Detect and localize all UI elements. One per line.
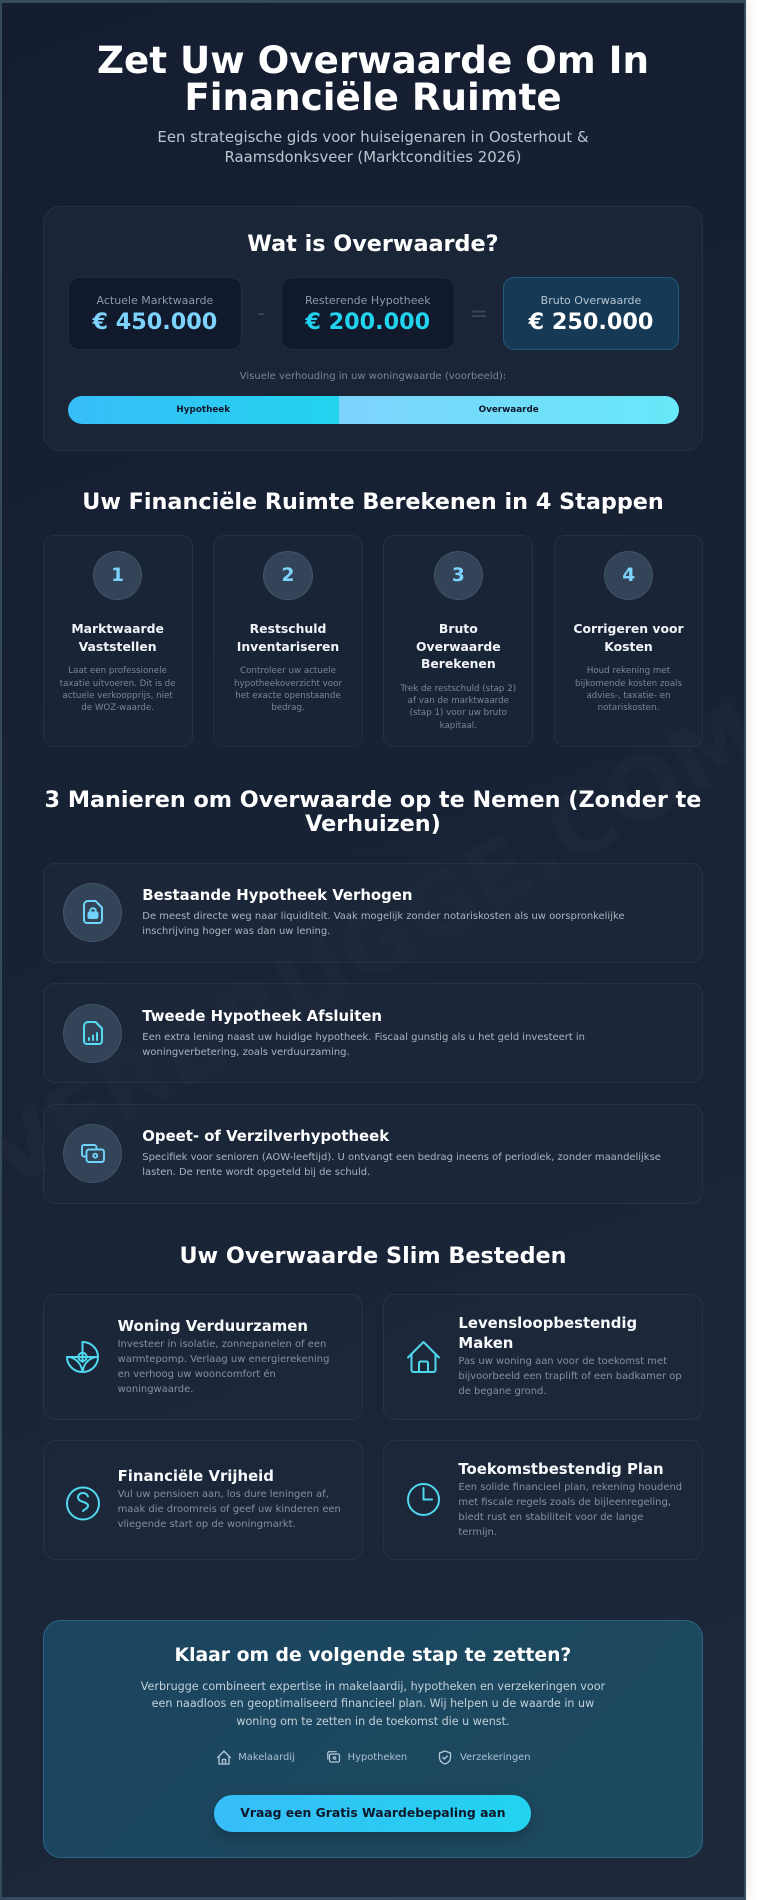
method title: Opeet- of Verzilverhypotheek — [142, 1127, 389, 1145]
label: Resterende Hypotheek — [305, 294, 431, 307]
panel heading: Wat is Overwaarde? — [247, 231, 499, 257]
heading: stappen: Uw Financiële Ruimte Berekenen in 4 Stappen — [82, 489, 664, 515]
card text: de begane grond. — [458, 1386, 547, 1397]
step title: Corrigeren voor — [573, 621, 684, 636]
step card 1 — [43, 535, 193, 747]
step number: 3 — [452, 565, 465, 586]
method card 1 — [43, 863, 703, 963]
step number: 1 — [111, 565, 124, 586]
step title — [237, 621, 339, 654]
step text: af van de marktwaarde — [408, 696, 509, 706]
method text — [142, 1032, 585, 1058]
card text: warmtepomp. Verlaag uw energierekening — [118, 1354, 329, 1364]
step title: Kosten — [604, 639, 653, 654]
card text — [118, 1489, 341, 1530]
cta title: Klaar om de volgende stap te zetten? — [175, 1645, 571, 1666]
method card 2 — [43, 983, 703, 1083]
use card: toekomstbestendig — [383, 1440, 703, 1560]
method text: Een extra lening naast uw huidige hypotheek. Fiscaal gunstig als u het geld investeert in — [142, 1032, 585, 1043]
service label: Verzekeringen — [460, 1752, 530, 1763]
icon: document with lock — [63, 883, 122, 942]
step title: Berekenen — [421, 656, 496, 671]
step text — [60, 666, 176, 713]
label: Actuele Marktwaarde — [96, 294, 213, 307]
step title: Vaststellen — [79, 639, 157, 654]
icon: banknotes — [327, 1751, 340, 1763]
step text: bedrag. — [271, 703, 305, 713]
step title: Marktwaarde — [71, 621, 164, 636]
method text — [142, 911, 624, 937]
step text — [575, 666, 682, 713]
method text — [142, 1152, 661, 1178]
step text: Houd rekening met — [587, 666, 670, 676]
subtitle — [157, 128, 589, 166]
card text: maak die droomreis of geef uw kinderen een — [118, 1504, 341, 1515]
icon: banknotes — [63, 1124, 122, 1183]
step title: Bruto — [439, 621, 478, 636]
header — [97, 38, 649, 166]
service: hypotheken — [327, 1751, 407, 1763]
card text: Een solide financieel plan, rekening houdend — [458, 1482, 682, 1493]
bar segment: hypotheek: Hypotheek — [176, 405, 230, 415]
step title — [416, 621, 501, 671]
panel: wat is overwaarde — [43, 206, 703, 451]
value box: marktwaarde — [68, 277, 242, 350]
cta text — [140, 1680, 606, 1728]
minus sign: - — [257, 300, 265, 326]
method text: inschrijving hoger was dan uw lening. — [142, 926, 330, 937]
heading: manieren: Verhuizen) — [305, 811, 441, 837]
step text: advies-, taxatie- en — [586, 691, 670, 701]
service label: Makelaardij — [238, 1752, 295, 1763]
card text: vliegende start op de woningmarkt. — [118, 1519, 296, 1530]
step number — [604, 551, 653, 600]
service: makelaardij — [217, 1750, 295, 1765]
method text: Specifiek voor senioren (AOW-leeftijd). U ontvangt een bedrag ineens of periodiek, zonder maandelijkse — [142, 1152, 661, 1163]
step card 4 — [554, 535, 703, 747]
step number — [434, 551, 483, 600]
use card: vrijheid — [43, 1440, 363, 1560]
card text: Vul uw pensioen aan, los dure leningen af, — [118, 1489, 329, 1500]
label: Bruto Overwaarde — [541, 294, 641, 307]
title — [97, 38, 649, 119]
step number: 2 — [282, 565, 294, 586]
heading: besteden: Uw Overwaarde Slim Besteden — [179, 1243, 567, 1269]
step title — [573, 621, 684, 654]
step title: Overwaarde — [416, 639, 501, 654]
heading: manieren: 3 Manieren om Overwaarde op te Nemen (Zonder te — [45, 787, 701, 813]
icon: house — [217, 1750, 231, 1765]
title: Financiële Ruimte — [184, 75, 562, 119]
card text: woningwaarde. — [118, 1384, 193, 1394]
card title: Toekomstbestendig Plan — [458, 1460, 664, 1478]
bar segment: overwaarde — [339, 396, 679, 424]
bar caption: Visuele verhouding in uw woningwaarde (voorbeeld): — [240, 371, 506, 382]
step text: (stap 1) voor uw bruto — [410, 708, 507, 718]
panel: call to action — [43, 1620, 703, 1858]
method title: Bestaande Hypotheek Verhogen — [142, 886, 412, 904]
value: € 200.000 — [305, 309, 430, 335]
method text: lasten. De rente wordt opgeteld bij de schuld. — [142, 1167, 370, 1178]
value box: bruto overwaarde — [503, 277, 679, 350]
service label: Hypotheken — [348, 1752, 407, 1763]
step text: hypotheekoverzicht voor — [234, 679, 342, 689]
value: € 250.000 — [529, 309, 653, 335]
step text: Controleer uw actuele — [240, 666, 336, 676]
method text: De meest directe weg naar liquiditeit. Vaak mogelijk zonder notariskosten als uw oorspronkelijke — [142, 911, 624, 922]
cta text: Verbrugge combineert expertise in makelaardij, hypotheken en verzekeringen voor — [141, 1680, 605, 1693]
icon: dollar coin — [66, 1486, 100, 1520]
step text — [400, 684, 516, 731]
use card: verduurzamen — [43, 1294, 363, 1420]
step number — [263, 551, 313, 600]
card text — [458, 1482, 682, 1538]
subtitle: Raamsdonksveer (Marktcondities 2026) — [225, 148, 521, 166]
method card 3 — [43, 1104, 703, 1204]
cta button — [214, 1795, 531, 1832]
subtitle: Een strategische gids voor huiseigenaren in Oosterhout & — [157, 128, 589, 146]
card text: termijn. — [458, 1527, 497, 1538]
step text: het exacte openstaande — [235, 691, 341, 701]
cta text: een naadloos en geoptimaliseerd financieel plan. Wij helpen u de waarde in uw — [152, 1697, 594, 1710]
card title: Levensloopbestendig — [458, 1314, 637, 1332]
step card 3 — [383, 535, 533, 747]
step number — [93, 551, 142, 600]
step text: kapitaal. — [440, 721, 477, 731]
heading: manieren — [45, 787, 701, 837]
use card: levensloopbestendig — [383, 1294, 703, 1420]
icon: house — [407, 1341, 440, 1373]
step text: Trek de restschuld (stap 2) — [400, 684, 516, 694]
step text — [234, 666, 342, 713]
cta button: Vraag een Gratis Waardebepaling aan — [240, 1806, 506, 1820]
step text: de WOZ-waarde. — [81, 703, 154, 713]
step number: 4 — [622, 565, 635, 586]
icon: document with bars — [63, 1004, 122, 1063]
value: € 450.000 — [92, 309, 217, 335]
step title: Restschuld — [250, 621, 326, 636]
card text — [118, 1338, 329, 1394]
proportion bar — [68, 396, 679, 424]
title: Zet Uw Overwaarde Om In — [97, 38, 649, 82]
step text: Laat een professionele — [68, 666, 167, 676]
card text: en verhoog uw wooncomfort én — [118, 1368, 276, 1380]
card text: Pas uw woning aan voor de toekomst met — [458, 1356, 667, 1367]
method title: Tweede Hypotheek Afsluiten — [142, 1007, 382, 1025]
card title: Woning Verduurzamen — [118, 1317, 308, 1335]
step text: taxatie uitvoeren. Dit is de — [60, 679, 176, 689]
step text: notariskosten. — [598, 703, 659, 713]
cta text: woning om te zetten in de toekomst die u wenst. — [236, 1715, 510, 1728]
card title — [458, 1314, 637, 1352]
card text: biedt rust en stabiliteit voor de lange — [458, 1512, 643, 1523]
card title: Financiële Vrijheid — [118, 1467, 274, 1485]
icon: eco globe — [66, 1341, 99, 1373]
service: verzekeringen — [438, 1750, 530, 1765]
icon: clock — [407, 1483, 440, 1516]
card text: bijvoorbeeld een traplift of een badkamer op — [458, 1371, 682, 1382]
bar segment: overwaarde: Overwaarde — [479, 405, 539, 415]
value box: hypotheek — [281, 277, 455, 350]
step card 2 — [213, 535, 363, 747]
bar segment: hypotheek — [68, 396, 339, 424]
card title: Maken — [458, 1334, 513, 1352]
card text: Investeer in isolatie, zonnepanelen of een — [118, 1338, 326, 1350]
card text — [458, 1356, 682, 1397]
equals sign: = — [470, 301, 488, 327]
step text: bijkomende kosten zoals — [575, 679, 682, 689]
step title: Inventariseren — [237, 639, 339, 654]
step text: actuele verkoopprijs, niet — [62, 691, 173, 701]
icon: shield — [438, 1750, 452, 1765]
step title — [71, 621, 164, 654]
method text: woningverbetering, zoals verduurzaming. — [142, 1047, 350, 1058]
card text: met fiscale regels zoals de bijleenregeling, — [458, 1497, 671, 1508]
